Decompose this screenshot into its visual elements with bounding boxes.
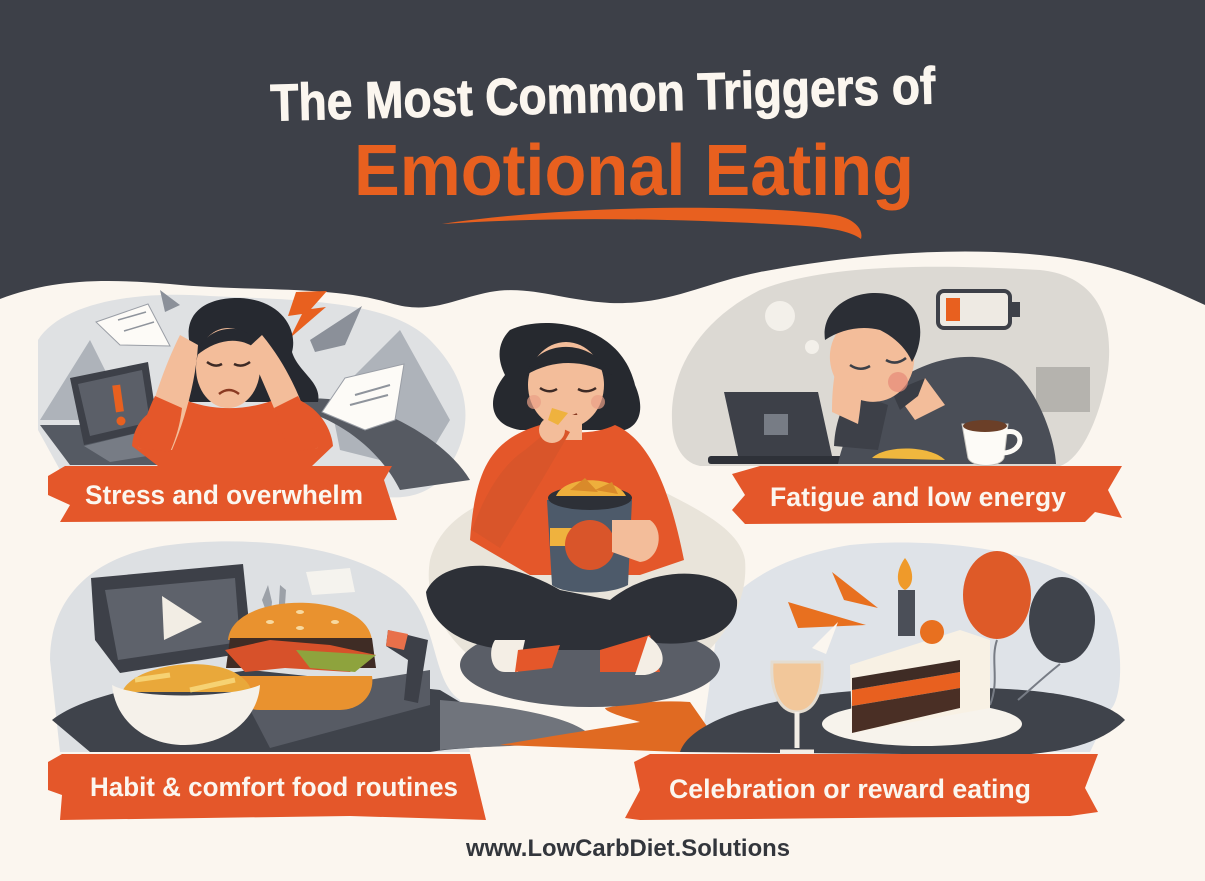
title [270, 57, 937, 239]
icon: lightning bolt [288, 291, 327, 338]
banner: fatigue and low energy [732, 466, 1122, 524]
icon: low battery [938, 291, 1020, 328]
icon: laptop with warning [70, 362, 185, 462]
icon: burger [225, 603, 376, 710]
figure: tired man [820, 293, 1056, 464]
icon: bowl of food [112, 664, 260, 745]
icon: flying papers [96, 304, 404, 430]
icon: snack plate [872, 448, 945, 460]
banner: habit and comfort food: Habit & comfort food routines [90, 772, 458, 802]
banner: stress and overwhelm [48, 466, 397, 522]
legs [426, 566, 737, 650]
snack bag [547, 478, 659, 592]
banner: celebration or reward [625, 754, 1098, 820]
dark header [0, 0, 1205, 307]
icon: balloons [963, 551, 1095, 705]
icon: candle [898, 558, 915, 636]
icon: laptop [708, 392, 948, 464]
panel: stress and overwhelm [38, 290, 470, 497]
banner: habit and comfort food [48, 754, 486, 820]
banner: fatigue and low energy: Fatigue and low energy [770, 482, 1066, 512]
icon: cake [822, 620, 1022, 746]
center figure: woman eating chips [426, 323, 745, 707]
panel: celebration or reward [500, 543, 1125, 755]
title: Emotional Eating [354, 131, 914, 211]
banner: stress and overwhelm: Stress and overwhelm [85, 480, 363, 510]
panel: habit and comfort food [50, 541, 590, 752]
icon: video player [91, 564, 252, 673]
banner: celebration or reward: Celebration or reward eating [669, 774, 1031, 804]
figure: stressed woman [132, 298, 333, 466]
icon: party shards [788, 572, 878, 654]
title: The Most Common Triggers of [270, 57, 937, 133]
website footer: www.LowCarbDiet.Solutions [465, 835, 790, 862]
panel: fatigue and low energy [672, 267, 1109, 466]
icon: glass of drink [772, 662, 822, 752]
icon: coffee cup [962, 420, 1020, 466]
